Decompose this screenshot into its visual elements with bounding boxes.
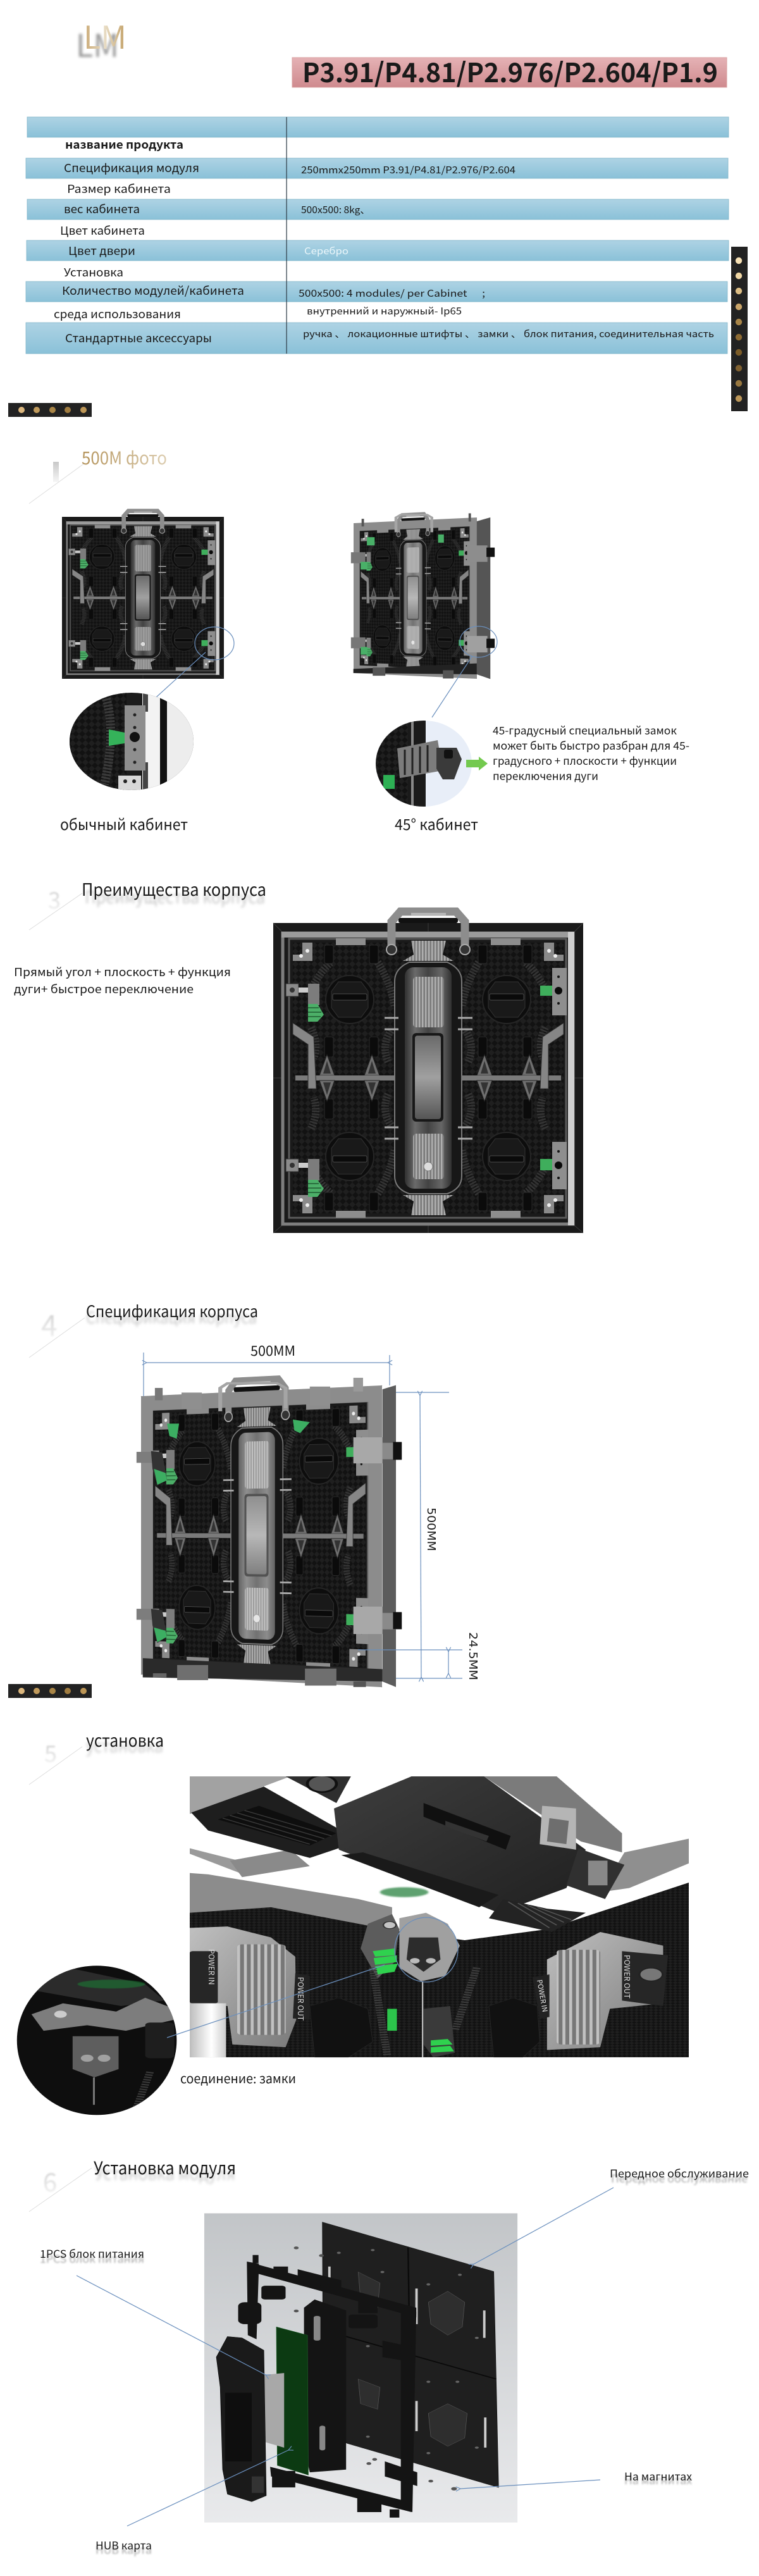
- heading: installation: установка: [86, 1727, 164, 1752]
- caption: connection locks: соединение: замки: [180, 2069, 296, 2087]
- detail marker circle: 45 degree: [460, 626, 497, 657]
- right column values: внутренний и наружный- Ip65: [307, 304, 462, 318]
- description: 45 degree lock: градусного + плоскости + функции: [493, 752, 677, 768]
- cabinet: specification perspective: [140, 1375, 382, 1688]
- left column labels: среда использования: [54, 306, 181, 322]
- label: HUB card: HUB карта: [96, 2541, 152, 2557]
- label: magnets: На магнитах: [624, 2468, 693, 2484]
- right column values: 500x500: 8kg、: [301, 203, 370, 216]
- icon: green arrow: [466, 757, 488, 771]
- exploded view: cabinet and module: [204, 2214, 517, 2522]
- specification table: [26, 117, 729, 354]
- right column values: [299, 163, 714, 340]
- description: 45 degree lock: переключения дуги: [493, 767, 598, 783]
- left column labels: Цвет кабинета: [60, 222, 145, 238]
- inset detail: 45 degree lock: [376, 721, 472, 807]
- section: module installation: [29, 2155, 749, 2557]
- section: cabinet specification: [8, 1299, 614, 2501]
- cabinet spec: side edge, locks and latches: [137, 1378, 402, 1687]
- left column labels: Спецификация модуля: [64, 159, 199, 176]
- arrow: magnets: [460, 2480, 600, 2489]
- heading: cabinet advantages: Преимущества корпуса: [82, 876, 266, 901]
- detail marker circle: [395, 1917, 458, 1982]
- left column labels: Стандартные аксессуары: [65, 330, 212, 346]
- labels on photo: POWER OUT: [295, 1977, 306, 2021]
- label: 1PCS power supply: 1PCS блок питания: [40, 2245, 144, 2261]
- left column labels: Размер кабинета: [67, 180, 171, 197]
- description: 45 degree lock: 45-градусный специальный замок: [493, 722, 677, 738]
- heading: module installation: Установка модуля: [94, 2155, 236, 2180]
- heading: installation: установка: [86, 1733, 163, 1757]
- heading: cabinet specification: Спецификация корпуса: [86, 1299, 258, 1322]
- right column values: ручка 、 локационные штифты 、 замки 、 блок питания, соединительная часть: [303, 327, 714, 340]
- logo: LM: LM: [76, 21, 119, 66]
- decorative dot strip: left: [8, 1684, 92, 1698]
- heading: cabinet advantages: [29, 876, 266, 930]
- logo: LM: LM: [83, 13, 126, 58]
- decorative dot strip: right: [731, 247, 748, 411]
- description: advantages: [14, 963, 231, 997]
- description: advantages: Прямый угол + плоскость + функция: [14, 963, 231, 980]
- left column labels: Цвет двери: [68, 242, 135, 259]
- heading: cabinet specification: [29, 1299, 258, 1358]
- cabinet 45 degree: side edge and latches: [351, 513, 495, 679]
- right column values: 500x500: 4 modules/ per Cabinet ;: [299, 287, 485, 300]
- right column values: 250mmx250mm P3.91/P4.81/P2.976/P2.604: [301, 163, 515, 176]
- description: 45 degree lock: [493, 722, 689, 783]
- dimension: 24.5MM: 24.5MM: [466, 1632, 479, 1680]
- module panels: [323, 2222, 498, 2487]
- inset detail: lock connection: [15, 1965, 178, 2116]
- heading: cabinet advantages: Преимущества корпуса: [85, 884, 265, 908]
- power box: [216, 2336, 266, 2502]
- section: 500M photo: [29, 445, 689, 1036]
- caption: 45 degree cabinet: 45° кабинет: [395, 812, 478, 834]
- arrow: power supply: [77, 2276, 266, 2375]
- left column labels: Количество модулей/кабинета: [62, 282, 244, 299]
- right column values: Серебро: [304, 244, 349, 257]
- label: HUB card: HUB карта: [96, 2537, 152, 2553]
- section: installation: [16, 1727, 689, 2115]
- leader line: 45 degree: [432, 657, 472, 717]
- label: 1PCS power supply: 1PCS блок питания: [40, 2250, 144, 2266]
- heading: installation: [29, 1727, 164, 1785]
- heading: cabinet specification: Спецификация корпуса: [86, 1306, 257, 1328]
- caption: standard cabinet: обычный кабинет: [60, 812, 188, 834]
- decorative dot strip: left: [8, 403, 92, 417]
- heading: module installation: [29, 2155, 236, 2212]
- power supply: [264, 2373, 284, 2448]
- description: advantages: дуги+ быстрое переключение: [14, 981, 194, 997]
- labels on photo: POWER IN: [534, 1979, 550, 2013]
- section: header and specification table: [8, 13, 748, 417]
- cabinet: large view: [273, 912, 583, 1233]
- left column labels: название продукта: [65, 136, 183, 152]
- photo: cabinets connected by lock: [190, 1776, 689, 2057]
- heading: cabinet advantages: 3: [48, 882, 61, 915]
- labels on photo: [206, 1949, 632, 2021]
- heading: module installation: 6: [43, 2162, 57, 2199]
- cabinet frame: [238, 2255, 417, 2518]
- leader line: [167, 1965, 385, 2038]
- title banner: P3.91/P4.81/P2.976/P2.604/P1.9: [302, 52, 718, 90]
- arrow: front maintenance: [474, 2188, 614, 2264]
- HUB card: [276, 2327, 308, 2475]
- labels on photo: POWER OUT: [622, 1955, 632, 1998]
- detail marker circle: standard: [195, 627, 234, 660]
- dimension: width 500MM: 500MM: [250, 1340, 295, 1360]
- label: front maintenance: Передное обслуживание: [611, 2170, 748, 2186]
- left column labels: вес кабинета: [64, 201, 140, 217]
- heading: installation: 5: [44, 1736, 57, 1769]
- dimension: height 500MM: 500MM: [424, 1508, 438, 1551]
- heading: cabinet specification: 4: [41, 1303, 58, 1345]
- left column labels: [54, 136, 244, 346]
- cabinet: standard: [62, 511, 224, 679]
- section: cabinet advantages: [14, 876, 583, 1234]
- label: magnets: На магнитах: [624, 2472, 693, 2487]
- heading: module installation: Установка модуля: [95, 2160, 235, 2186]
- cabinet: 45 degree perspective: [354, 512, 477, 679]
- label: front maintenance: Передное обслуживание: [610, 2165, 749, 2181]
- heading: 500M фото: 500M фото: [82, 445, 167, 470]
- description: 45 degree lock: может быть быстро разбран для 45-: [493, 737, 689, 753]
- left column labels: Установка: [64, 264, 123, 280]
- inset detail: standard lock: [70, 693, 194, 790]
- leader line: standard: [156, 652, 206, 698]
- magnets: [294, 2246, 457, 2491]
- labels on photo: POWER IN: [206, 1949, 217, 1985]
- heading: 500M фото: [29, 445, 167, 504]
- arrow: HUB card: [127, 2450, 288, 2526]
